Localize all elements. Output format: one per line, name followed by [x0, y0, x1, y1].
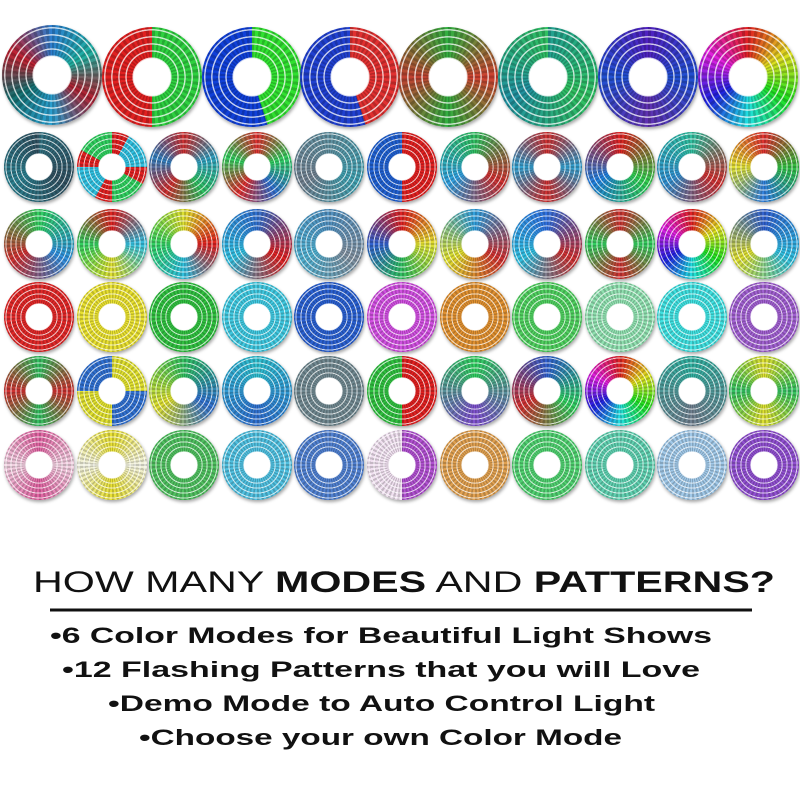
row 1 of patterns — [1, 25, 800, 131]
grid of light pattern circles — [1, 25, 800, 504]
row 6 of patterns — [3, 430, 800, 504]
bullet list — [50, 623, 712, 750]
text block: modes and patterns — [33, 566, 775, 750]
row 4 of patterns — [3, 282, 800, 356]
bullet list: •6 Color Modes for Beautiful Light Shows — [50, 623, 712, 648]
bullet list: •Demo Mode to Auto Control Light — [108, 691, 656, 716]
row 2 of patterns — [3, 132, 800, 206]
row 5 of patterns — [3, 356, 800, 430]
title: HOW MANY MODES AND PATTERNS? — [33, 566, 775, 599]
bullet list: •12 Flashing Patterns that you will Love — [62, 657, 700, 682]
bullet list: •Choose your own Color Mode — [139, 725, 622, 750]
row 3 of patterns — [3, 209, 800, 282]
